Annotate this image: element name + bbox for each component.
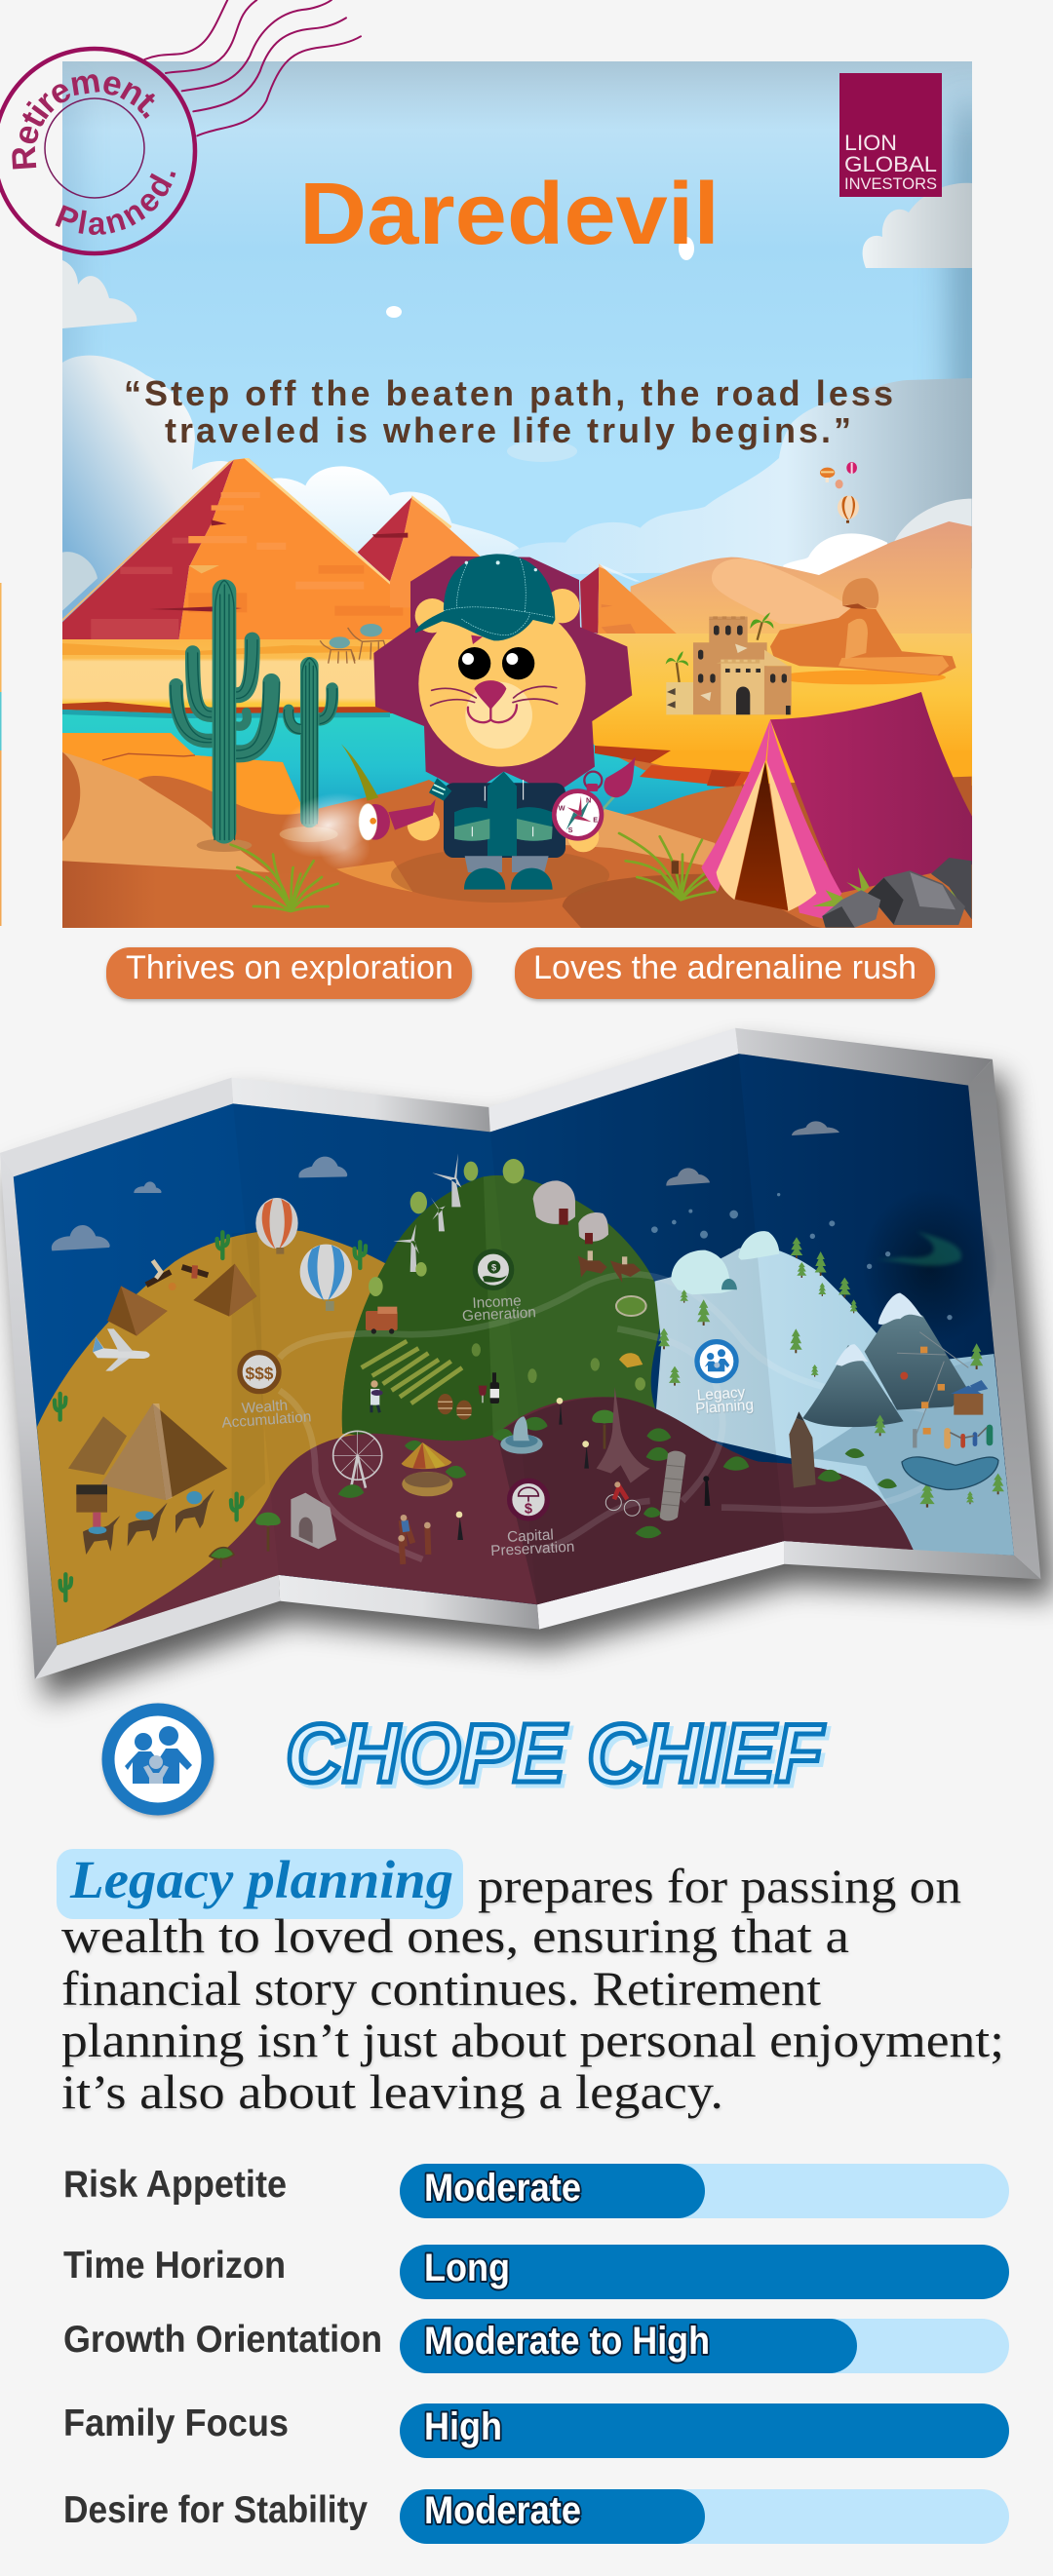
flashlight: [359, 799, 440, 841]
map shadow: [10, 1048, 1053, 1701]
compass: W: [559, 804, 566, 813]
hill trees: [369, 1159, 645, 1391]
wind turbines: [393, 1153, 461, 1272]
label: capital preservation: Capital: [507, 1526, 554, 1546]
row: Family Focus: Family Focus: [63, 2403, 289, 2444]
panel fold shading: [233, 1054, 784, 1604]
stamp text: Planned.: [55, 172, 176, 235]
eyes: [458, 647, 534, 679]
cacti: [55, 1232, 366, 1600]
lift cabins and skier: [900, 1347, 945, 1435]
label: legacy planning: Legacy: [696, 1384, 746, 1404]
frozen lake: [902, 1457, 998, 1489]
ground base: [208, 756, 972, 860]
tower: [789, 1411, 816, 1488]
logo: Lion Global Investors: [839, 73, 942, 197]
character: lion explorer: [359, 554, 636, 890]
tents: [107, 1264, 256, 1336]
lamp posts: [456, 1398, 589, 1540]
icon: legacy planning: [697, 1342, 736, 1381]
vineyard rows: [362, 1341, 462, 1403]
label: wealth accumulation: Accumulation: [221, 1408, 312, 1432]
campfire campers: [146, 1260, 208, 1290]
clouds: [52, 1157, 347, 1250]
compass: S: [568, 826, 573, 834]
mountains: [802, 1293, 968, 1427]
row: Desire for Stability: Moderate: [424, 2489, 581, 2532]
nose, whiskers and mouth: [431, 681, 558, 722]
arc de triomphe: [291, 1493, 336, 1549]
icon: capital preservation: $: [525, 1502, 532, 1518]
row: Desire for Stability: Desire for Stability: [63, 2489, 368, 2531]
stamp text: [12, 74, 176, 235]
flower bed and car: [616, 1296, 646, 1367]
label: income generation: Generation: [462, 1304, 536, 1325]
rocks and plants: [812, 858, 972, 928]
ground: [62, 752, 441, 928]
icon: chope chief badge: [108, 1710, 208, 1809]
row: Desire for Stability: [63, 2489, 1009, 2544]
compass: [552, 772, 604, 852]
stamp rings: [0, 49, 195, 253]
paragraph: legacy description: [61, 1859, 1004, 2119]
carousel: [402, 1442, 452, 1496]
muzzle: [465, 682, 532, 749]
label: wealth accumulation: [220, 1396, 312, 1432]
hill: maroon region: [99, 1397, 914, 1633]
quote: “Step off the beaten path, the road less: [124, 373, 893, 413]
small white puffs: [386, 237, 694, 462]
label: income generation: Income: [472, 1292, 522, 1312]
pill: Thrives on exploration: [106, 947, 472, 999]
hill: yellow region: [37, 1230, 403, 1645]
clouds behind pyramids: [62, 466, 546, 611]
label: capital preservation: Preservation: [490, 1539, 575, 1559]
pine trees: [658, 1237, 1004, 1508]
faint trails: [280, 1274, 943, 1559]
paragraph: legacy description: wealth to loved ones, ensuring that a: [61, 1908, 849, 1963]
camels: [320, 624, 387, 664]
olive blade and torch beam: [283, 745, 378, 868]
row: Growth Orientation: Growth Orientation: [63, 2319, 382, 2361]
chalet: [951, 1380, 988, 1415]
paragraph: legacy description: prepares for passing on: [478, 1859, 961, 1913]
crowd: [398, 1515, 431, 1564]
sand bands: [62, 634, 972, 786]
stamp: Retirement. Planned.: [0, 0, 362, 255]
sky: [62, 61, 972, 685]
row: Time Horizon: Long: [424, 2247, 510, 2289]
sphinx: [770, 578, 956, 684]
hill: green region: [342, 1175, 661, 1448]
trees around fair: [338, 1410, 670, 1538]
ground: right side: [559, 777, 972, 933]
tent: [701, 692, 973, 919]
row: Family Focus: High: [424, 2405, 502, 2448]
label: legacy planning: [694, 1384, 755, 1417]
head: [418, 620, 586, 767]
region: income generation: [291, 1153, 670, 1564]
tail: [603, 757, 636, 811]
plane: [93, 1328, 150, 1371]
pyramid: large: [62, 458, 419, 646]
lion shadow: [391, 848, 609, 903]
icon: capital preservation: [510, 1480, 547, 1519]
grass: left tuft: [231, 845, 338, 911]
fountain: [500, 1416, 543, 1454]
pill: Loves the adrenaline rush: Loves the adrenaline rush: [533, 949, 916, 986]
lamp post: [703, 1476, 710, 1506]
logo: Lion Global Investors: INVESTORS: [844, 174, 937, 193]
cap: [415, 554, 555, 644]
quote: traveled is where life truly begins.”: [165, 410, 851, 450]
label: legacy planning: Planning: [695, 1397, 755, 1417]
yurts: [533, 1180, 608, 1244]
logo: Lion Global Investors: GLOBAL: [844, 152, 937, 176]
jacket: [429, 772, 566, 858]
left edge strip: [0, 583, 2, 926]
icon: income generation: [475, 1251, 512, 1288]
row: Time Horizon: Time Horizon: [63, 2245, 286, 2287]
heading: CHOPE CHIEF: CHOPE CHIEF: [286, 1708, 825, 1800]
farmer: [370, 1380, 383, 1412]
aurora and night glow: [861, 1189, 997, 1345]
row: Time Horizon: [63, 2245, 1009, 2299]
highlight chip: Legacy planning: Legacy planning: [69, 1850, 453, 1909]
sky edge shading: [47, 88, 989, 536]
clouds: [666, 1121, 839, 1186]
paragraph: legacy description: planning isn’t just about personal enjoyment;: [61, 2013, 1004, 2067]
pill: Loves the adrenaline rush: [515, 947, 935, 999]
title: Daredevil: Daredevil: [299, 166, 720, 263]
legs and feet: [464, 856, 553, 890]
castle with palms: [666, 612, 792, 714]
cyclist: [605, 1481, 640, 1516]
stamp text: Retirement.: [12, 74, 155, 170]
van: [366, 1307, 398, 1334]
icon: wealth accumulation: [240, 1353, 279, 1392]
heading: CHOPE CHIEF: CHOPE CHIEF: [290, 1711, 829, 1804]
row: Growth Orientation: Moderate to High: [424, 2320, 710, 2363]
barrels and wine: [438, 1372, 499, 1420]
cactus: left: [171, 581, 338, 852]
cloud: large lower left: [62, 356, 239, 624]
balloons: [820, 462, 859, 523]
grass: right tuft: [618, 832, 717, 902]
quote: [124, 373, 893, 450]
cloud: top right: [863, 183, 972, 268]
ferris wheel: [333, 1431, 382, 1488]
paragraph: legacy description: financial story continues. Retirement: [61, 1961, 821, 2016]
water and cliffs: [62, 702, 750, 815]
row: Risk Appetite: Moderate: [424, 2167, 581, 2210]
pyramid: third: [580, 563, 677, 634]
eiffel tower: [597, 1387, 650, 1483]
pyramids: [68, 1403, 227, 1500]
icon: income generation: $: [491, 1262, 497, 1272]
hill: ice region: [654, 1247, 1014, 1556]
camels: [83, 1489, 214, 1555]
logo: Lion Global Investors: LION: [844, 131, 897, 155]
small green trees: [210, 1513, 281, 1567]
dunes and sphinx hills: [630, 521, 972, 634]
paragraph: legacy description: it’s also about leaving a legacy.: [61, 2064, 723, 2119]
icon: wealth accumulation: $$$: [246, 1364, 274, 1383]
horses: [578, 1250, 641, 1283]
chairlift: [897, 1332, 968, 1447]
balloon: blue: [300, 1245, 352, 1311]
label: income generation: [461, 1292, 536, 1325]
igloos: [671, 1231, 779, 1294]
postmark wavy lines: [144, 0, 361, 135]
panel: desert scene: [47, 61, 1005, 933]
ears: [415, 589, 579, 633]
maroon trees: [644, 1428, 897, 1518]
pisa tower: [660, 1451, 685, 1520]
balloon: orange: [255, 1198, 298, 1254]
map paper and sky: [0, 1028, 1040, 1679]
mane: [373, 557, 632, 794]
region: wealth accumulation: [52, 1157, 366, 1600]
row: Risk Appetite: [63, 2164, 1009, 2218]
treasure chest: [76, 1484, 107, 1513]
compass: N: [586, 795, 591, 804]
panel: fold-out map: [0, 1028, 1053, 1701]
row: Growth Orientation: [63, 2319, 1009, 2373]
pyramid: second: [358, 495, 485, 607]
clouds at the right of the sky: [507, 378, 972, 578]
compass: E: [593, 815, 598, 824]
region: legacy planning: [644, 1121, 1004, 1520]
family: [948, 1428, 990, 1445]
cactus: right: [285, 658, 336, 824]
pill: Thrives on exploration: Thrives on exploration: [126, 949, 453, 986]
label: wealth accumulation: Wealth: [241, 1398, 289, 1417]
snowflakes: [651, 1193, 953, 1320]
row: Family Focus: [63, 2403, 1009, 2458]
label: capital preservation: [489, 1525, 575, 1559]
cloud: left: [62, 260, 136, 328]
row: Risk Appetite: Risk Appetite: [63, 2164, 287, 2206]
